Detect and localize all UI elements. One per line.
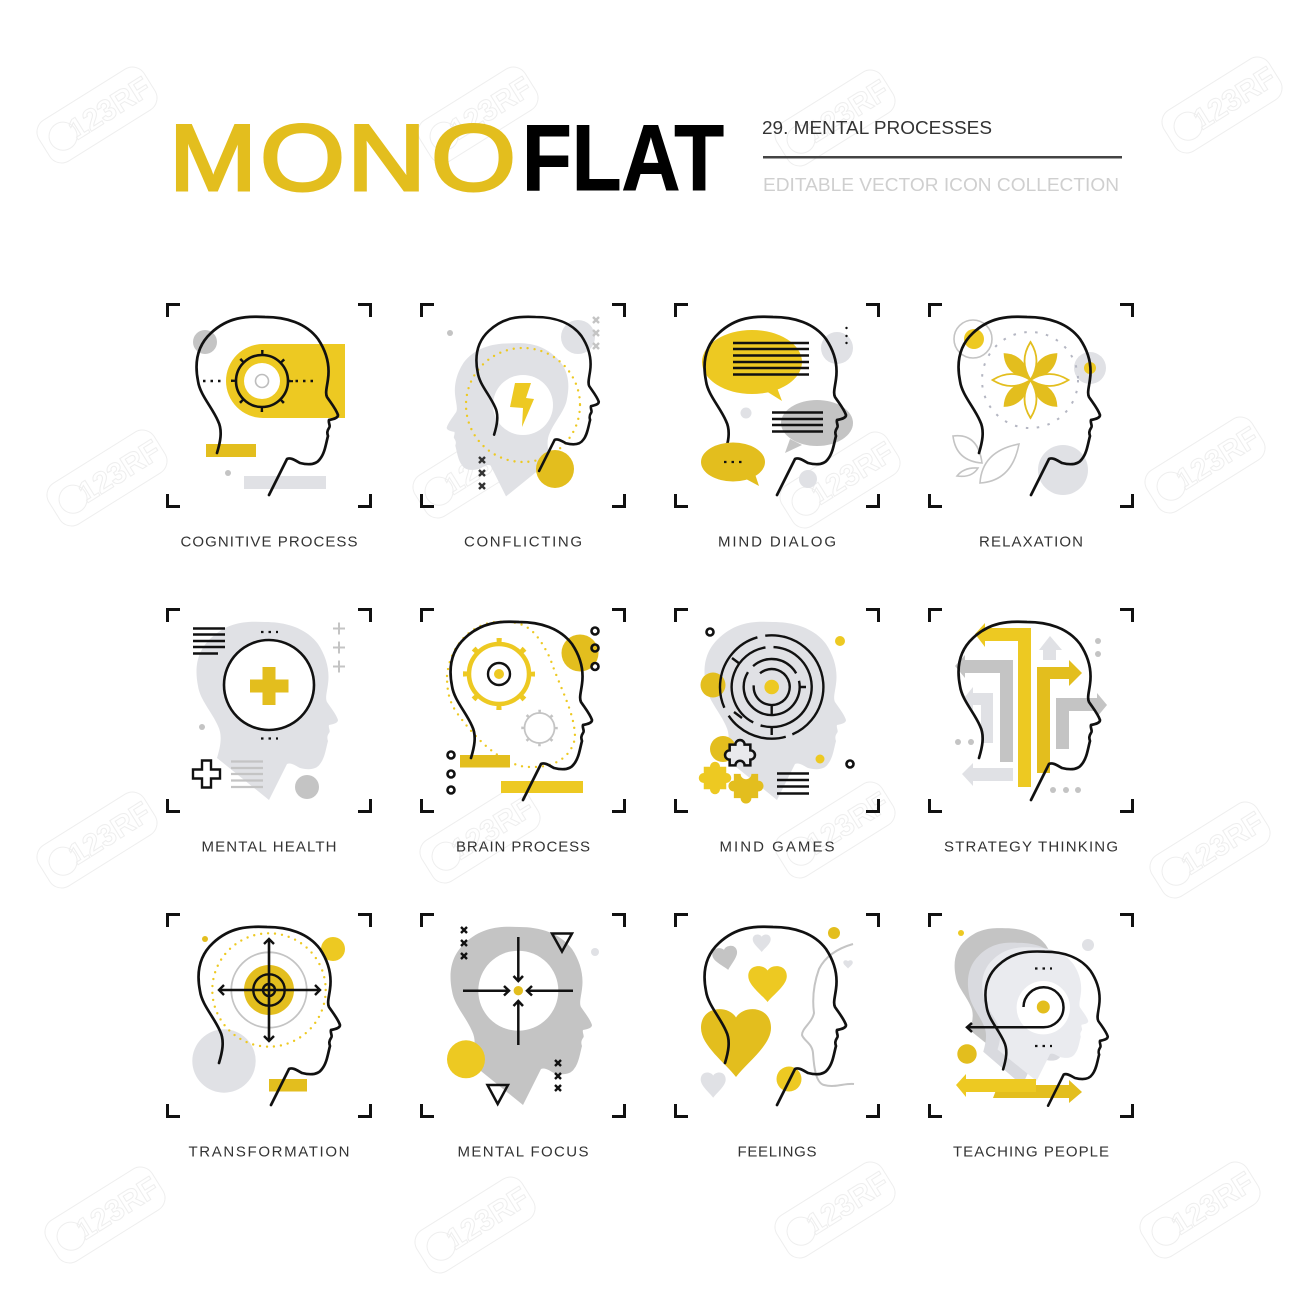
icon: medium heart [748, 966, 787, 1002]
icon: leaves [953, 436, 1019, 483]
title: MONOFLAT: N [347, 105, 426, 210]
panel: mental focus [422, 914, 624, 1160]
panel: mind dialog [676, 304, 878, 550]
title: MONOFLAT: O [431, 105, 516, 210]
icon: spiral arrow [967, 987, 1063, 1032]
panel: mind games [676, 610, 878, 856]
title: MONOFLAT: O [260, 105, 345, 210]
subtitle: collection number: 29. MENTAL PROCESSES [762, 118, 992, 138]
dotted region [447, 622, 575, 767]
icon: grey gear [523, 712, 556, 744]
panel: cognitive process: COGNITIVE PROCESS [180, 534, 358, 550]
icon: medical cross in circle [224, 640, 314, 730]
icon: large speech bubble [702, 330, 802, 401]
icon: large heart [701, 1009, 771, 1077]
icon: yellow gear [466, 641, 532, 707]
panel: relaxation [930, 304, 1132, 550]
icon: gear target [234, 352, 290, 410]
panel: transformation [168, 914, 370, 1160]
panel: mental health [168, 610, 370, 856]
icon: converging arrows [463, 937, 573, 1045]
subtitle: editable collection: EDITABLE VECTOR ICON COLLECTION [763, 175, 1119, 195]
icon: maze [699, 614, 845, 760]
arrow: dark yellow [1037, 660, 1082, 773]
icon: target with four arrows [219, 939, 320, 1041]
panel: feelings: FEELINGS [738, 1144, 816, 1160]
icon: flower [992, 342, 1068, 418]
panel: brain process: BRAIN PROCESS [456, 838, 590, 856]
arrow: bright yellow [975, 623, 1031, 787]
title: MONOFLAT: M [169, 105, 257, 210]
arrows: light grey [962, 636, 1062, 786]
panel: feelings [676, 914, 878, 1160]
icon: small speech bubble [701, 442, 765, 486]
icon: lightning bolt [510, 383, 534, 427]
panel: relaxation: RELAXATION [979, 534, 1083, 550]
panel: strategy thinking [930, 610, 1132, 856]
arrows: mid grey [955, 655, 1107, 762]
panel: mental health: MENTAL HEALTH [202, 838, 336, 856]
panel: conflicting [422, 304, 624, 550]
panel: mind games: MIND GAMES [720, 838, 834, 856]
panel: mental focus: MENTAL FOCUS [458, 1144, 588, 1160]
panel: teaching people: TEACHING PEOPLE [953, 1144, 1109, 1160]
icon: yellow puzzle piece [699, 762, 731, 794]
panel: mind dialog: MIND DIALOG [718, 534, 836, 550]
panel: cognitive process [168, 304, 370, 550]
panel: teaching people [930, 914, 1132, 1160]
title: MONOFLAT: FLAT [522, 105, 724, 210]
panel: strategy thinking: STRATEGY THINKING [944, 838, 1118, 856]
icon: outlined puzzle piece [725, 740, 755, 765]
panel: transformation: TRANSFORMATION [188, 1144, 350, 1160]
icon: left arrow [956, 1074, 1036, 1097]
icon: right arrow [993, 1080, 1082, 1103]
icon: yellow puzzle piece two [728, 774, 764, 804]
panel: conflicting: CONFLICTING [464, 534, 582, 550]
panel: brain process [422, 610, 624, 856]
layered grey heads [955, 928, 1088, 1085]
icon: grey speech bubble [781, 400, 853, 453]
header divider [763, 156, 1122, 158]
